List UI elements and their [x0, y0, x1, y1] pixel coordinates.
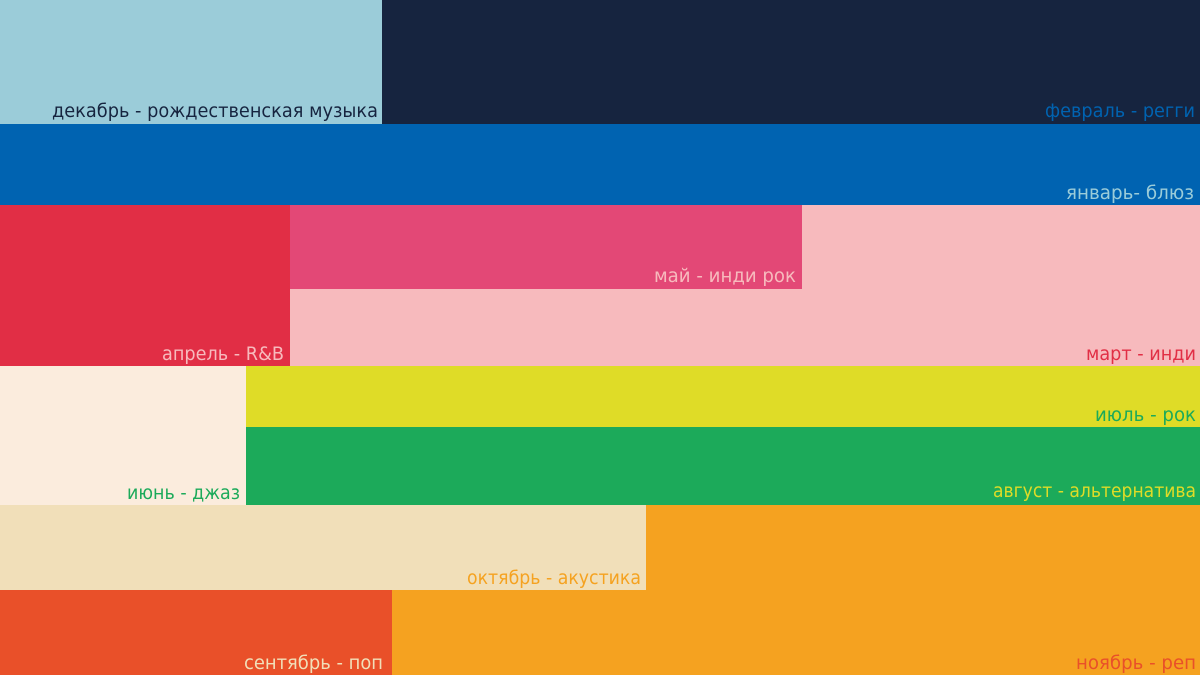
- panel: February, reggae: февраль - регги: [1045, 101, 1195, 122]
- panel: April, R&B: [0, 205, 290, 366]
- panel: September, pop: [0, 590, 392, 675]
- panel: March, indie: март - инди: [1086, 344, 1196, 365]
- panel: January, blues: январь- блюз: [1066, 183, 1194, 204]
- panel: July, rock: июль - рок: [1095, 405, 1196, 426]
- panel: January, blues: [0, 124, 1200, 205]
- panel: April, R&B: апрель - R&B: [162, 344, 284, 365]
- panel: November, rap: ноябрь - реп: [1076, 653, 1196, 674]
- panel: May, indie rock: [290, 205, 802, 289]
- panel: December, Christmas music: [0, 0, 382, 124]
- panel: September, pop: сентябрь - поп: [244, 653, 383, 674]
- panel: March, indie: [290, 205, 1200, 366]
- panel: October, acoustic: октябрь - акустика: [467, 568, 641, 589]
- panel: May, indie rock: май - инди рок: [654, 266, 796, 287]
- panel: December, Christmas music: декабрь - рождественская музыка: [52, 101, 378, 122]
- panel: June, jazz: июнь - джаз: [127, 483, 240, 504]
- panel: February, reggae: [382, 0, 1200, 124]
- panel: October, acoustic: [0, 505, 646, 590]
- panel: August, alternative: [246, 427, 1200, 505]
- panel: November, rap: [392, 505, 1200, 675]
- panel: June, jazz: [0, 366, 246, 505]
- panel: July, rock: [246, 366, 1200, 427]
